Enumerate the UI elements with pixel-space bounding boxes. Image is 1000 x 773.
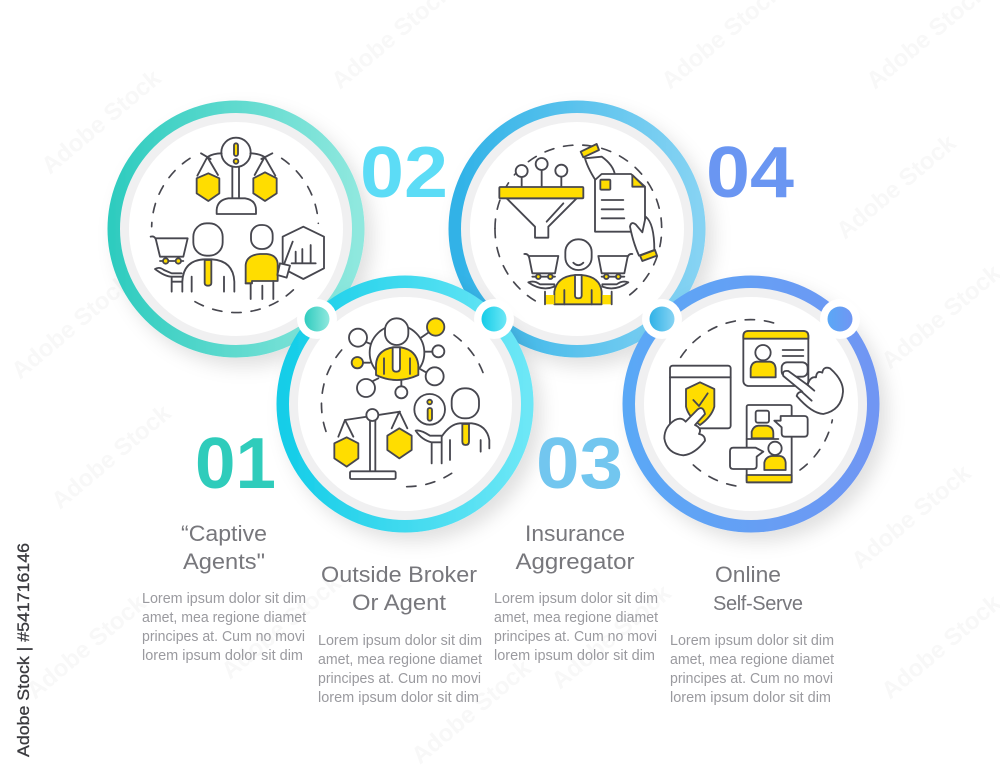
body: insurance aggregator: lorem ipsum dolor sit dim xyxy=(494,648,655,664)
panel: step 4 online self-serve circle xyxy=(629,282,873,526)
heading: online self-serve: Online xyxy=(715,562,781,587)
body: online self-serve: lorem ipsum dolor sit dim xyxy=(670,690,831,706)
text: Adobe Stock xyxy=(547,579,677,695)
body: captive agents: amet, mea regione diamet xyxy=(142,610,306,626)
number 04: 04 xyxy=(706,133,794,213)
body: outside broker: amet, mea regione diamet xyxy=(318,652,482,668)
connector dot: step 3 to 4 xyxy=(642,299,682,339)
body: captive agents: principes at. Cum no movi xyxy=(142,629,305,645)
body: online self-serve: amet, mea regione diamet xyxy=(670,652,834,668)
text: Adobe Stock xyxy=(47,399,177,515)
body: insurance aggregator: Lorem ipsum dolor sit dim xyxy=(494,591,658,607)
heading: insurance aggregator: Aggregator xyxy=(516,549,634,574)
text: Adobe Stock xyxy=(37,64,167,180)
body: insurance aggregator: principes at. Cum no movi xyxy=(494,629,657,645)
body: outside broker: lorem ipsum dolor sit dim xyxy=(318,690,479,706)
text: Adobe Stock xyxy=(832,129,962,245)
stock id caption: Adobe Stock | #541716146 xyxy=(14,543,33,757)
number 03: 03 xyxy=(536,424,623,504)
text: Adobe Stock xyxy=(22,589,152,705)
number 01: 01 xyxy=(195,424,276,504)
text: Adobe Stock xyxy=(407,654,537,770)
heading: captive agents: “Captive xyxy=(181,521,267,546)
number 02: 02 xyxy=(360,133,448,213)
text: Adobe Stock xyxy=(217,569,347,685)
heading: outside broker: Outside Broker xyxy=(321,562,477,587)
heading: online self-serve: Self-Serve xyxy=(713,593,803,615)
text block: online self-serve xyxy=(670,562,834,706)
text: Adobe Stock xyxy=(847,459,977,575)
body: online self-serve: principes at. Cum no movi xyxy=(670,671,833,687)
body: insurance aggregator: amet, mea regione diamet xyxy=(494,610,658,626)
icon: funnel, document, and agent with carts xyxy=(495,144,662,304)
text block: outside broker xyxy=(318,562,482,706)
icon: online windows, hands, and phone chat xyxy=(664,320,843,487)
text block: captive agents xyxy=(142,521,306,664)
panel: step 1 captive agents circle xyxy=(114,107,358,351)
heading: captive agents: Agents" xyxy=(183,549,265,574)
heading: insurance aggregator: Insurance xyxy=(525,521,625,546)
connector dot: step 2 to 3 xyxy=(474,299,514,339)
panel: step 3 insurance aggregator circle xyxy=(455,107,699,351)
connector dot: step 4 end xyxy=(820,299,860,339)
body: outside broker: Lorem ipsum dolor sit dim xyxy=(318,633,482,649)
icon: scales, agents, cart, and chart xyxy=(151,138,324,313)
icon: broker network, scales, and info xyxy=(321,318,489,487)
body: captive agents: Lorem ipsum dolor sit dim xyxy=(142,591,306,607)
connector dot: step 1 to 2 xyxy=(297,299,337,339)
body: outside broker: principes at. Cum no movi xyxy=(318,671,481,687)
panel: step 2 outside broker circle xyxy=(283,282,527,526)
text block: insurance aggregator xyxy=(494,521,658,664)
text: Adobe Stock xyxy=(7,269,137,385)
body: online self-serve: Lorem ipsum dolor sit dim xyxy=(670,633,834,649)
body: captive agents: lorem ipsum dolor sit dim xyxy=(142,648,303,664)
heading: outside broker: Or Agent xyxy=(352,590,446,615)
